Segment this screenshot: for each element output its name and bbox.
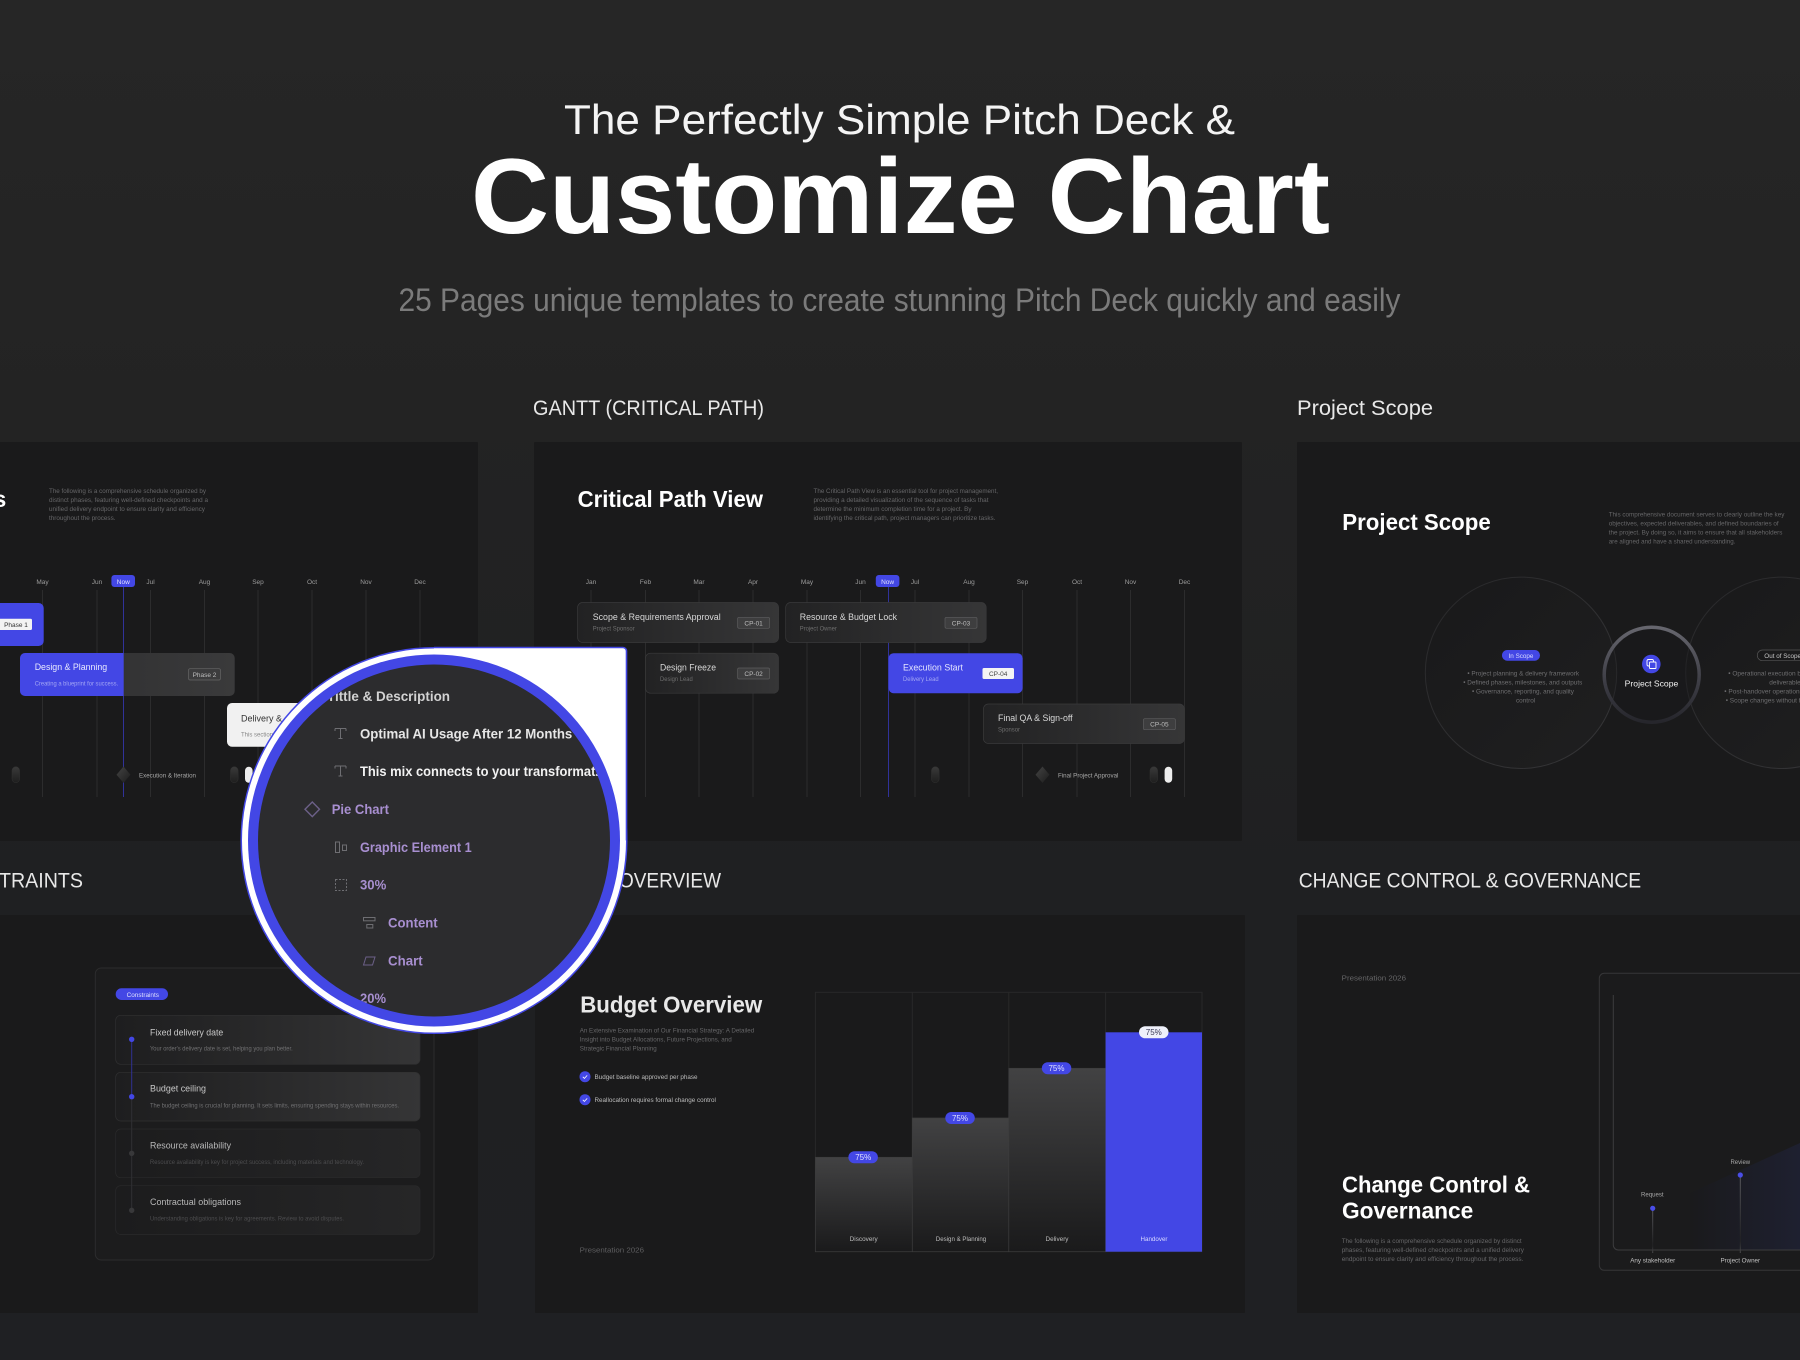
- heading: [1342, 1172, 1530, 1224]
- row: fixed delivery date: [116, 1015, 420, 1064]
- title: Customize Chart: [471, 136, 1330, 256]
- timeline months: Dec: [1179, 579, 1191, 586]
- card: CP-02: CP-02: [744, 671, 763, 678]
- phase 2 bar: Phase 2: [193, 672, 217, 679]
- bar: discovery: 75%: [855, 1153, 871, 1162]
- card: CP-02: Design Lead: [660, 677, 693, 683]
- timeline months: Sep: [1017, 579, 1029, 586]
- circle: in scope: [1425, 577, 1617, 768]
- row: contractual obligations: Understanding obligations is key for agreements. Review to avoid disputes.: [150, 1217, 344, 1223]
- timeline months: Now: [117, 579, 130, 586]
- description: phases, featuring well-defined checkpoints and a unified delivery: [1342, 1247, 1525, 1254]
- panel: budget overview: [535, 915, 1245, 1313]
- card: CP-03: [786, 602, 986, 642]
- icon: overlapping squares: [1642, 655, 1661, 673]
- card: CP-04: Delivery Lead: [903, 677, 939, 683]
- layer: graphic element: Graphic Element 1: [360, 839, 472, 855]
- section label: constraints: TRAINTS: [0, 869, 83, 893]
- description: endpoint to ensure clarity and efficiency throughout the process.: [1342, 1256, 1524, 1263]
- card: CP-05: Sponsor: [998, 728, 1020, 734]
- checklist: Reallocation requires formal change control: [594, 1097, 716, 1104]
- heading: Governance: [1342, 1198, 1473, 1224]
- phase 1 bar: Phase 1: [4, 622, 28, 629]
- section label: budget overview: OVERVIEW: [619, 869, 722, 893]
- badge: [116, 988, 168, 1000]
- phase 3 bar: [227, 703, 317, 747]
- header: [398, 96, 1400, 318]
- presentation label: Presentation 2026: [1342, 973, 1406, 982]
- row: contractual obligations: Contractual obligations: [150, 1197, 241, 1207]
- card: CP-05: [983, 704, 1184, 744]
- row: resource availability: Resource availability: [150, 1140, 231, 1150]
- bar: handover: 75%: [1146, 1028, 1162, 1037]
- card: CP-01: [578, 602, 779, 642]
- row: budget ceiling: [116, 1072, 420, 1121]
- checklist: [580, 1071, 716, 1105]
- progress line with dots: [129, 1037, 134, 1213]
- phase 2 bar: Creating a blueprint for success.: [35, 682, 119, 688]
- card: CP-01: Scope & Requirements Approval: [593, 612, 721, 622]
- timeline months: Aug: [199, 579, 211, 586]
- card: CP-03: Project Owner: [800, 627, 837, 633]
- timeline months: Jul: [146, 579, 155, 586]
- timeline months: Nov: [1125, 579, 1137, 586]
- circle: out of scope: Out of Scope: [1764, 653, 1800, 660]
- heading: Project Scope: [1342, 509, 1491, 535]
- card: CP-01: Project Sponsor: [593, 627, 635, 633]
- layer: pie chart: [305, 801, 389, 817]
- timeline months: Nov: [360, 579, 373, 586]
- heading: Change Control &: [1342, 1172, 1530, 1198]
- bar: delivery: Delivery: [1046, 1236, 1069, 1243]
- description: This comprehensive document serves to clearly outline the key: [1609, 512, 1785, 519]
- timeline months: Mar: [693, 579, 705, 586]
- bar: design and planning: Design & Planning: [936, 1236, 987, 1243]
- row: fixed delivery date: Fixed delivery date: [150, 1027, 223, 1037]
- description: distinct phases, featuring well-defined checkpoints and a: [49, 497, 208, 504]
- heading: Critical Path View: [578, 486, 763, 512]
- description: are aligned and have a shared understanding.: [1609, 539, 1736, 546]
- card: CP-04: Execution Start: [903, 663, 963, 673]
- bar: design and planning: 75%: [952, 1114, 968, 1123]
- description: the project. By doing so, it aims to ensure that all stakeholders: [1609, 530, 1783, 537]
- timeline months: Jul: [911, 579, 920, 586]
- timeline months: Now: [881, 579, 894, 586]
- center: project scope node: [1604, 627, 1699, 722]
- phase 1 bar: [0, 603, 44, 646]
- step: request: Request: [1641, 1192, 1664, 1199]
- description: objectives, expected deliverables, and defined boundaries of: [1609, 521, 1779, 528]
- circle: in scope: • Governance, reporting, and quality: [1472, 689, 1575, 696]
- panel: critical path view: [534, 442, 1242, 841]
- description: determine the minimum completion time for a project. By: [814, 506, 972, 513]
- panel: change control: [1297, 915, 1800, 1313]
- description: The following is a comprehensive schedule organized by distinct: [1342, 1238, 1522, 1245]
- card: CP-03: Resource & Budget Lock: [800, 612, 897, 622]
- row: contractual obligations: [116, 1186, 420, 1234]
- circle: in scope: • Defined phases, milestones, and outputs: [1463, 680, 1583, 687]
- layer: 30 percent: [335, 879, 386, 891]
- timeline months: Oct: [307, 579, 317, 586]
- card: CP-02: Design Freeze: [660, 663, 716, 673]
- timeline months: [586, 575, 1191, 797]
- magnifier callout: [240, 647, 628, 1034]
- step: review: [1720, 1159, 1760, 1265]
- timeline months: Jun: [855, 579, 866, 586]
- section label: change control: CHANGE CONTROL & GOVERNANCE: [1299, 869, 1641, 893]
- row: budget ceiling: The budget ceiling is crucial for planning. It sets limits, ensuring spending stays within resources.: [150, 1103, 399, 1109]
- description: The Critical Path View is an essential tool for project management,: [814, 488, 998, 495]
- layer: title and description: Tittle & Description: [327, 688, 450, 704]
- row: fixed delivery date: Your order's delivery date is set, helping you plan better.: [150, 1047, 293, 1053]
- layer: chart: [362, 956, 422, 966]
- layer: 30 percent: 30%: [360, 877, 387, 893]
- bar: handover: Handover: [1140, 1236, 1168, 1243]
- description: [814, 488, 998, 522]
- bar: delivery: [1009, 1062, 1106, 1252]
- description: throughout the process.: [49, 515, 116, 522]
- timeline months: May: [801, 579, 814, 586]
- section label: project scope: Project Scope: [1297, 396, 1433, 420]
- layer: chart: Chart: [388, 952, 423, 968]
- center: project scope node: Project Scope: [1625, 679, 1679, 689]
- milestone markers: Execution & Iteration: [139, 773, 196, 780]
- description: Strategic Financial Planning: [580, 1046, 657, 1053]
- circle: out of scope: [1686, 577, 1800, 768]
- step: review: Review: [1730, 1159, 1751, 1166]
- phase 2 bar: Design & Planning: [35, 662, 107, 672]
- checklist: Budget baseline approved per phase: [594, 1074, 698, 1081]
- bar: design and planning: [912, 1112, 1009, 1252]
- description: [1609, 512, 1785, 546]
- card: CP-05: CP-05: [1150, 722, 1169, 729]
- timeline months: Apr: [748, 579, 759, 586]
- description: The following is a comprehensive schedule organized by: [49, 488, 207, 495]
- row: resource availability: Resource availability is key for project success, including materials and technology.: [150, 1160, 364, 1166]
- milestone markers: [12, 766, 253, 783]
- phase 3 bar: Delivery &: [241, 714, 282, 724]
- circle: in scope: In Scope: [1509, 653, 1534, 660]
- row: resource availability: [116, 1129, 420, 1178]
- panel: project scope: [1297, 442, 1800, 841]
- subtitle: 25 Pages unique templates to create stunning Pitch Deck quickly and easily: [398, 282, 1400, 318]
- row: budget ceiling: Budget ceiling: [150, 1084, 206, 1094]
- layer list: [305, 688, 599, 1006]
- heading: Budget Overview: [580, 992, 762, 1018]
- phase 3 bar: This section: [241, 733, 273, 739]
- description: [49, 488, 208, 522]
- constraints card: [95, 968, 434, 1260]
- card: CP-04: [889, 653, 1023, 693]
- panel: gantt phases: [0, 442, 478, 841]
- process chart: [1599, 973, 1800, 1270]
- description: [1342, 1238, 1525, 1263]
- layer: 20 percent: 20%: [360, 990, 387, 1006]
- bar chart: [815, 992, 1202, 1252]
- panel: constraints: [0, 915, 478, 1313]
- phase 2 bar: [20, 653, 235, 696]
- timeline months: Oct: [1072, 579, 1082, 586]
- timeline months: Jun: [92, 579, 103, 586]
- timeline months: Dec: [414, 579, 427, 586]
- timeline months: Feb: [640, 579, 651, 586]
- step: review: Project Owner: [1720, 1258, 1760, 1265]
- bar: delivery: 75%: [1048, 1064, 1065, 1073]
- bar: handover: [1106, 1026, 1202, 1252]
- timeline months: [36, 575, 427, 797]
- timeline months: May: [36, 579, 49, 586]
- layer: content: [363, 917, 438, 928]
- footer note: Presentation 2026: [580, 1245, 644, 1254]
- description: An Extensive Examination of Our Financial Strategy: A Detailed: [580, 1028, 755, 1035]
- card: CP-02: [646, 653, 778, 693]
- card: CP-01: CP-01: [744, 620, 763, 627]
- circle: in scope: control: [1516, 698, 1536, 705]
- description: providing a detailed visualization of the sequence of tasks that: [814, 497, 989, 504]
- section label: gantt: GANTT (CRITICAL PATH): [533, 396, 764, 420]
- card: CP-04: CP-04: [989, 671, 1008, 678]
- layer: graphic element: [335, 842, 472, 855]
- layer: content: Content: [388, 914, 438, 930]
- description: Insight into Budget Allocations, Future Projections, and: [580, 1037, 732, 1044]
- layer: optimal AI usage: Optimal AI Usage After 12 Months: [360, 725, 572, 741]
- step: request: Any stakeholder: [1630, 1258, 1675, 1265]
- description: identifying the critical path, project managers can prioritize tasks.: [814, 515, 996, 522]
- badge: Constraints: [127, 992, 160, 999]
- card: CP-05: Final QA & Sign-off: [998, 713, 1073, 723]
- timeline months: Aug: [963, 579, 975, 586]
- step: request: [1630, 1192, 1675, 1265]
- layer: pie chart: Pie Chart: [332, 801, 389, 817]
- description: [580, 1028, 755, 1053]
- timeline months: Jan: [586, 579, 597, 586]
- timeline months: Sep: [252, 579, 264, 586]
- card: CP-03: CP-03: [952, 620, 971, 627]
- circle: in scope: • Project planning & delivery framework: [1467, 671, 1580, 678]
- description: unified delivery endpoint to ensure clarity and efficiency: [49, 506, 206, 513]
- bar: discovery: Discovery: [850, 1236, 879, 1243]
- bar: discovery: [815, 1151, 912, 1252]
- header line: The Perfectly Simple Pitch Deck &: [564, 96, 1235, 143]
- milestone markers: [932, 766, 1172, 783]
- layer: this mix: This mix connects to your transformat.: [360, 763, 599, 779]
- milestone markers: Final Project Approval: [1058, 773, 1118, 780]
